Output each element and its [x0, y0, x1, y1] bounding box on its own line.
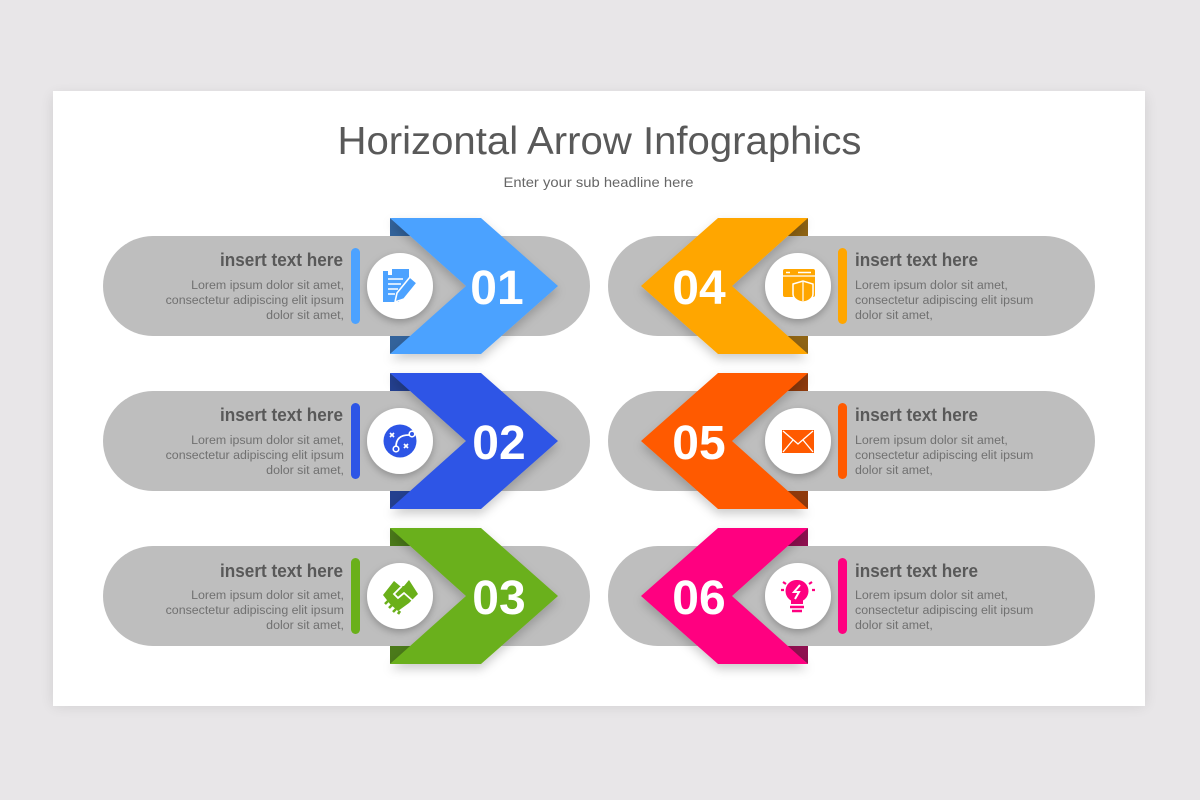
arrow — [641, 528, 808, 664]
subtitle: Enter your sub headline here — [504, 174, 694, 190]
body text: dolor sit amet, — [266, 308, 344, 322]
body text: consectetur adipiscing elit ipsum — [855, 448, 1033, 462]
number: 04 — [672, 262, 726, 315]
panel: item 06 — [608, 528, 1095, 664]
arrow — [390, 373, 558, 509]
accent bar — [351, 558, 360, 634]
icon: envelope — [765, 408, 831, 474]
pill background — [103, 546, 590, 646]
icon: strategy plan — [367, 408, 433, 474]
body text: Lorem ipsum dolor sit amet, — [855, 278, 1008, 292]
arrow — [641, 218, 808, 354]
accent bar — [838, 248, 847, 324]
body text: dolor sit amet, — [855, 308, 933, 322]
heading: insert text here — [220, 561, 343, 581]
heading: insert text here — [855, 405, 978, 425]
arrow — [390, 218, 558, 354]
body text: Lorem ipsum dolor sit amet, — [191, 278, 344, 292]
body text: Lorem ipsum dolor sit amet, — [191, 433, 344, 447]
arrow — [641, 373, 808, 509]
body text: dolor sit amet, — [266, 463, 344, 477]
body text: dolor sit amet, — [855, 618, 933, 632]
icon: document and pencil — [367, 253, 433, 319]
panel: item 01 — [103, 218, 590, 354]
panel: item 02 — [103, 373, 590, 509]
panel: item 03 — [103, 528, 590, 664]
body text: Lorem ipsum dolor sit amet, — [855, 588, 1008, 602]
heading: insert text here — [220, 250, 343, 270]
pill background — [103, 391, 590, 491]
pill background — [608, 546, 1095, 646]
body text: consectetur adipiscing elit ipsum — [855, 603, 1033, 617]
number: 02 — [472, 417, 526, 470]
body text: dolor sit amet, — [855, 463, 933, 477]
number: 03 — [472, 572, 526, 625]
body text: consectetur adipiscing elit ipsum — [166, 293, 344, 307]
accent bar — [351, 248, 360, 324]
body text: Lorem ipsum dolor sit amet, — [855, 433, 1008, 447]
pill background — [608, 236, 1095, 336]
number: 05 — [672, 417, 726, 470]
number: 01 — [470, 262, 524, 315]
icon: handshake — [367, 563, 433, 629]
background card — [53, 91, 1145, 706]
arrow — [390, 528, 558, 664]
panel: item 05 — [608, 373, 1095, 509]
pill background — [608, 391, 1095, 491]
heading: insert text here — [220, 405, 343, 425]
accent bar — [351, 403, 360, 479]
body text: consectetur adipiscing elit ipsum — [166, 603, 344, 617]
pill background — [103, 236, 590, 336]
accent bar — [838, 403, 847, 479]
heading: insert text here — [855, 250, 978, 270]
title: Horizontal Arrow Infographics — [338, 120, 862, 163]
icon: browser shield — [765, 253, 831, 319]
accent bar — [838, 558, 847, 634]
body text: consectetur adipiscing elit ipsum — [855, 293, 1033, 307]
body text: dolor sit amet, — [266, 618, 344, 632]
body text: consectetur adipiscing elit ipsum — [166, 448, 344, 462]
body text: Lorem ipsum dolor sit amet, — [191, 588, 344, 602]
number: 06 — [672, 572, 726, 625]
heading: insert text here — [855, 561, 978, 581]
icon: light bulb — [765, 563, 831, 629]
panel: item 04 — [608, 218, 1095, 354]
